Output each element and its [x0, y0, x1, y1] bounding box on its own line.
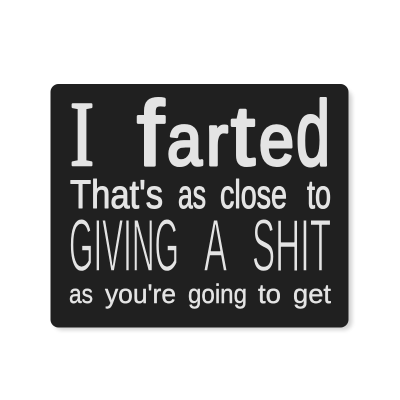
line: as you're going to get — [69, 279, 331, 309]
line: GIVING A SHIT: GIVING — [69, 204, 179, 287]
headline: I farted — [70, 83, 330, 185]
line: That's as close to: as — [178, 173, 206, 217]
line: That's as close to — [70, 173, 331, 217]
line: as you're going to get: you're — [105, 279, 176, 309]
headline: I farted: r — [206, 101, 228, 181]
mouse pad card — [50, 84, 348, 328]
card shadow — [54, 90, 352, 330]
line: That's as close to: close — [220, 173, 287, 217]
headline: I farted: t — [231, 89, 255, 183]
line: as you're going to get: to — [258, 279, 281, 309]
headline: I farted: d — [296, 83, 330, 185]
line: as you're going to get: going — [188, 279, 247, 309]
headline: I farted: f — [137, 83, 164, 185]
line: as you're going to get: get — [293, 279, 331, 309]
line: That's as close to: That's — [70, 173, 163, 217]
headline: I farted: I — [70, 83, 94, 185]
line: as you're going to get: as — [69, 279, 93, 309]
headline: I farted: a — [167, 101, 203, 181]
headline: I farted: e — [259, 101, 294, 181]
line: That's as close to: to — [307, 173, 331, 217]
line: GIVING A SHIT: A — [204, 204, 227, 287]
